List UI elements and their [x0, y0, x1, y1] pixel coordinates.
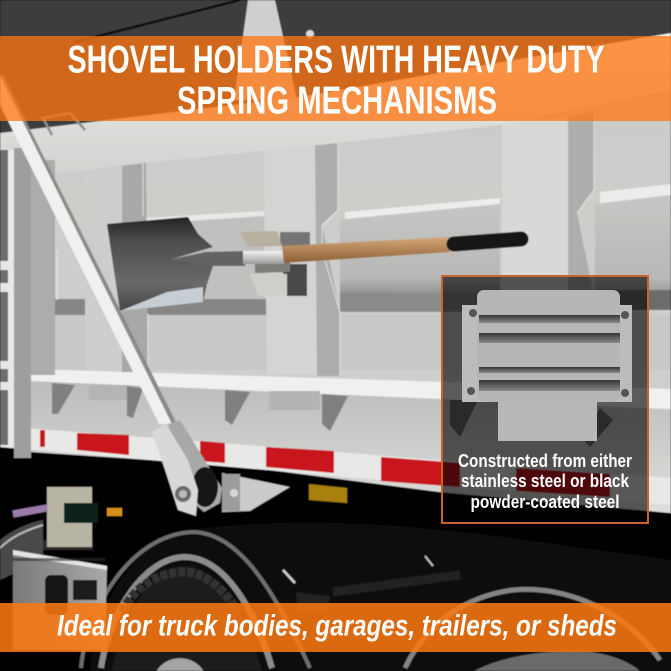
tire left [112, 566, 262, 671]
tarp metal tab [234, 0, 297, 100]
mount bracket [222, 473, 290, 512]
control box [13, 487, 122, 550]
hub left [156, 658, 204, 671]
ladder post [0, 148, 55, 458]
fender left [81, 523, 671, 671]
bottom banner [0, 603, 671, 652]
reflective strip [0, 426, 671, 505]
axle hitch [281, 554, 461, 603]
panel recess shading [54, 184, 671, 316]
callout panel [442, 276, 648, 523]
title: SPRING MECHANISMS [177, 80, 497, 122]
callout text: Constructed from either [458, 451, 632, 471]
tire right [474, 651, 640, 671]
top rail [0, 33, 671, 180]
ledge support gussets [52, 383, 348, 431]
truck body panels [0, 60, 671, 513]
black grip [454, 239, 521, 244]
callout text [458, 451, 632, 512]
tarp grommet [306, 30, 314, 38]
rail handle [43, 113, 85, 135]
top banner [0, 36, 671, 121]
lower body [30, 380, 671, 513]
tarp strap [75, 0, 240, 42]
callout text: powder-coated steel [470, 492, 620, 512]
wooden handle [282, 237, 450, 263]
undercarriage [0, 440, 671, 671]
callout text: stainless steel or black [461, 471, 630, 491]
red reflectors [3, 427, 610, 497]
warning sticker [309, 484, 347, 503]
vertical posts [85, 112, 595, 384]
ledge [30, 369, 671, 409]
title [68, 38, 604, 122]
shovel neck and ferrule [172, 251, 285, 266]
holder product icon [450, 290, 632, 447]
tarp [0, 0, 671, 134]
diagonal arm [0, 75, 177, 424]
panel background [442, 276, 648, 523]
arm bracket [152, 420, 222, 516]
welds [57, 113, 594, 376]
fender right [402, 586, 663, 670]
toolbox [0, 520, 107, 650]
shovel holder on truck [240, 231, 310, 296]
shovel blade [107, 217, 213, 311]
